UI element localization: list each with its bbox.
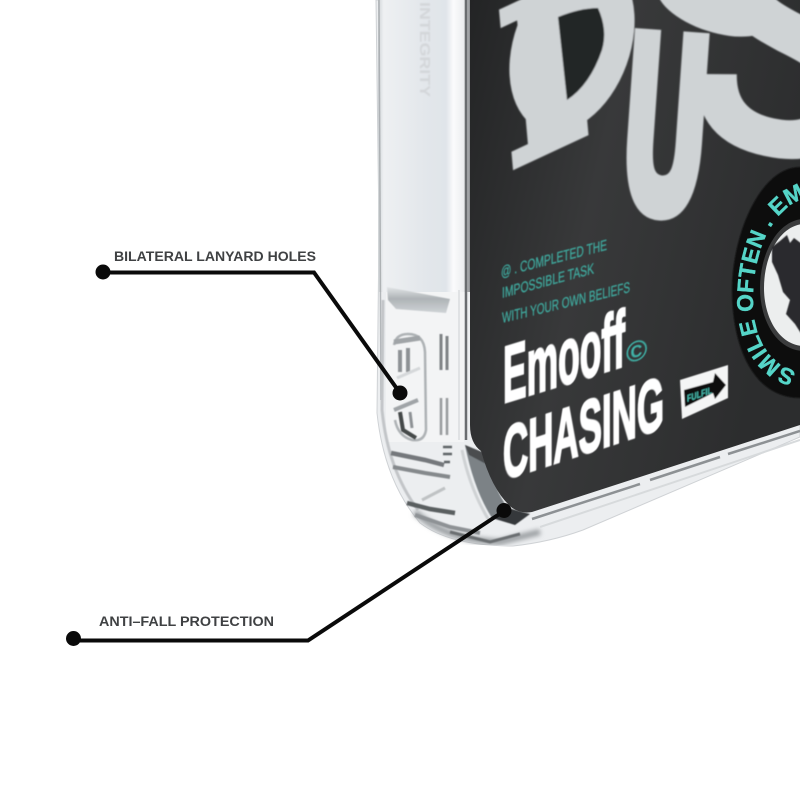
end dot (496, 503, 512, 518)
start dot (96, 264, 110, 280)
label: ANTI–FALL PROTECTION (99, 614, 274, 629)
graffiti lettering (498, 0, 800, 222)
slogan text: @ . COMPLETED THE (501, 237, 607, 281)
clear case body (376, 0, 800, 546)
callout: anti-fall protection (66, 503, 512, 646)
bilateral lanyard holes (394, 334, 447, 440)
clear side wall (378, 0, 540, 542)
slogan text (501, 237, 630, 327)
circular emblem text (736, 183, 800, 385)
infographic canvas (66, 0, 800, 646)
leader line (103, 272, 400, 393)
embossed side text: INTEGRITY (416, 2, 433, 97)
emblem disc (732, 167, 800, 398)
panel artwork: Emooff (503, 294, 625, 421)
start dot (66, 631, 81, 646)
back panel (470, 0, 800, 512)
bottom edge ridge (532, 431, 800, 527)
end dot (392, 386, 408, 400)
callout: bilateral lanyard holes (96, 249, 408, 400)
leader line (73, 511, 504, 640)
lower corner ridges (391, 447, 520, 542)
globe ring (760, 219, 800, 351)
fulfil arrow tag (680, 365, 728, 419)
globe (764, 224, 800, 346)
anti-fall corner bumper (465, 445, 530, 525)
copyright mark: © (626, 333, 648, 371)
label: BILATERAL LANYARD HOLES (114, 249, 316, 264)
slogan text: WITH YOUR OWN BELIEFS (502, 279, 630, 327)
round emblem (732, 166, 800, 398)
side button recess (387, 287, 450, 313)
phone case (376, 0, 800, 546)
panel artwork (498, 0, 800, 479)
continent (772, 235, 800, 335)
slogan text: IMPOSSIBLE TASK (502, 261, 594, 302)
fulfil arrow tag: FULFIL (687, 386, 712, 405)
